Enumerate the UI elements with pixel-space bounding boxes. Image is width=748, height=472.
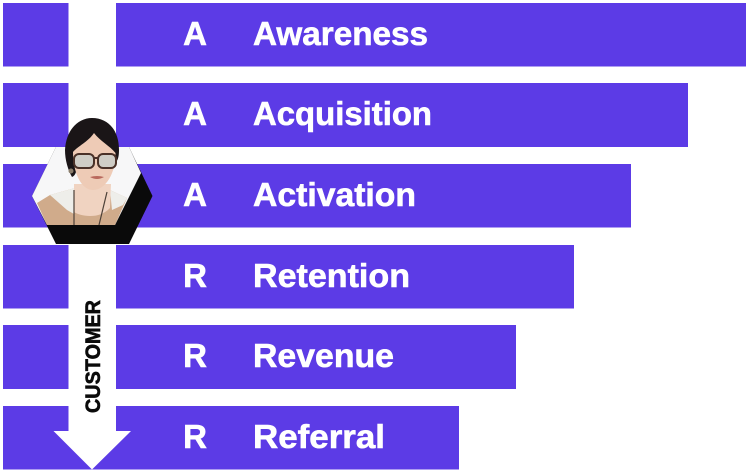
glasses: [74, 154, 94, 168]
bar: Referral: Referral: [253, 418, 385, 455]
bar: Acquisition: [3, 83, 688, 147]
bar: Acquisition: A: [183, 95, 207, 132]
bar: Referral: R: [183, 418, 207, 455]
body: [37, 188, 127, 225]
hair: [65, 118, 119, 177]
mouth: [90, 176, 104, 179]
bar: Awareness: A: [183, 15, 207, 52]
bar: Retention: Retention: [253, 257, 410, 294]
bar: Awareness: Awareness: [253, 15, 428, 52]
arrow: customer journey: [54, 406, 131, 470]
icon: customer portrait hexagon: [32, 118, 152, 244]
bar: Acquisition: Acquisition: [253, 95, 432, 132]
bar: Activation: A: [183, 176, 207, 213]
earring: [68, 168, 74, 174]
bar: Retention: R: [183, 257, 207, 294]
bar: Awareness: [3, 3, 746, 66]
bar: Revenue: [3, 325, 516, 389]
face: [73, 133, 116, 190]
label: CUSTOMER: CUSTOMER: [82, 300, 105, 413]
bar: Activation: Activation: [253, 176, 416, 213]
bar: Revenue: Revenue: [253, 337, 394, 374]
bar: Activation: [3, 164, 631, 228]
bar: Revenue: R: [183, 337, 207, 374]
bar: Retention: [3, 245, 574, 308]
bar: Referral: [3, 406, 459, 470]
necklace: [74, 190, 107, 225]
